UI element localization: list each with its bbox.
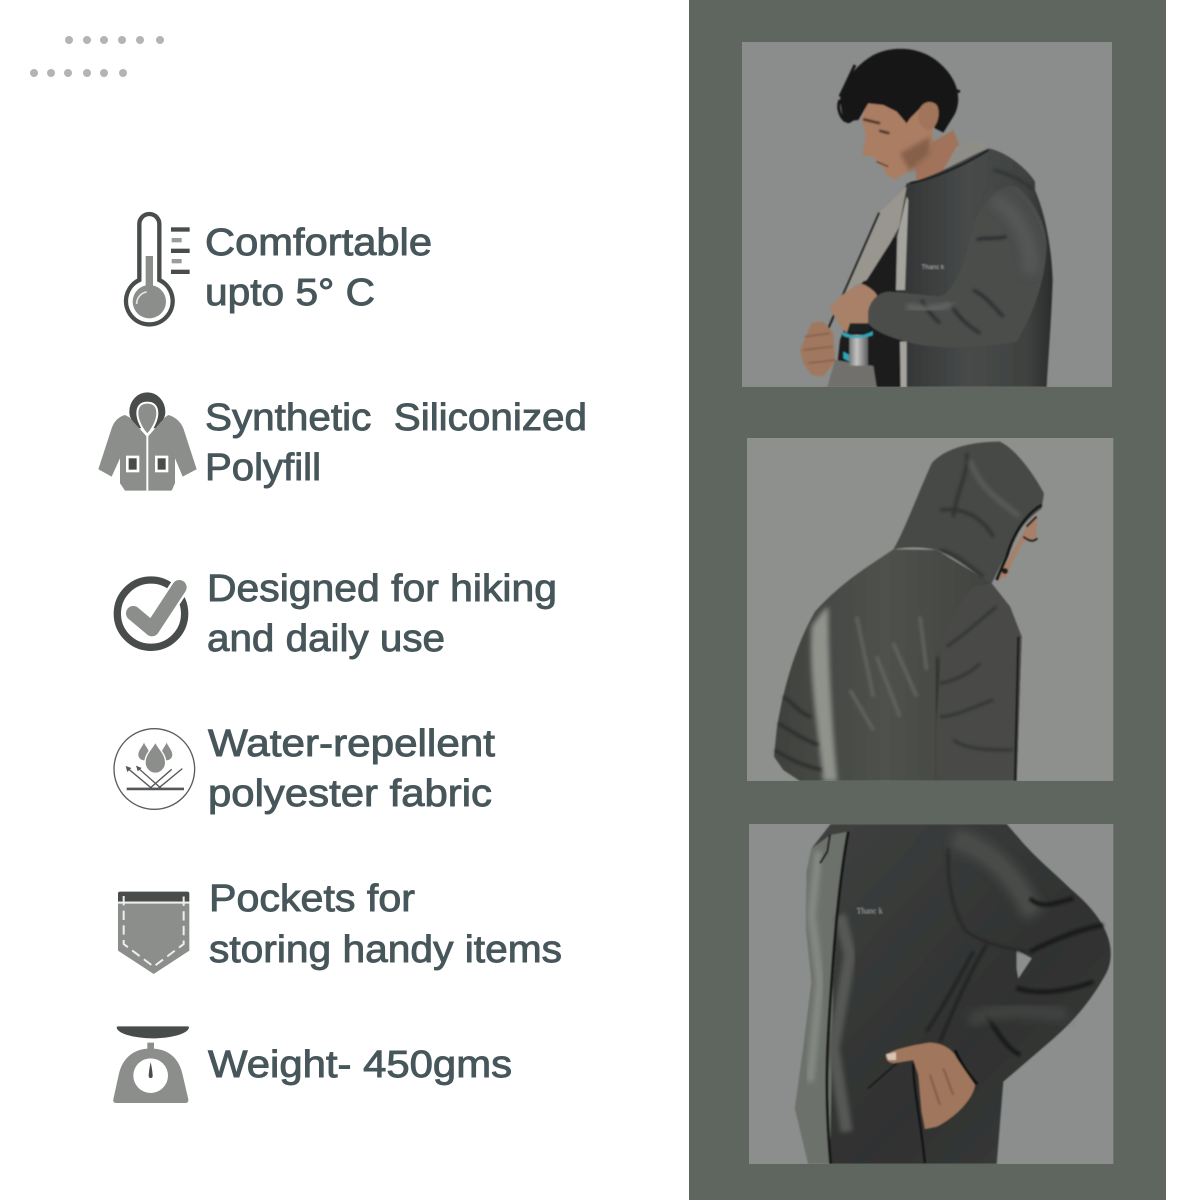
- back highlight: [811, 607, 837, 781]
- face: [862, 103, 933, 179]
- text: synthetic siliconized polyfill: Polyfill: [205, 447, 321, 489]
- text: designed for hiking: [207, 568, 557, 660]
- hood fold: [910, 150, 988, 183]
- icon: thermometer: [126, 214, 190, 324]
- upper hand: [830, 284, 877, 333]
- lining panel: [844, 186, 908, 292]
- hood: [893, 442, 1044, 583]
- icon: jacket: [98, 392, 197, 491]
- feature: pockets: [118, 878, 562, 974]
- text: designed for hiking: Designed for hiking: [207, 568, 557, 610]
- neck: [913, 130, 962, 182]
- jacket body and arm: [795, 824, 1111, 1164]
- text: pockets for storing handy items: Pockets for: [209, 878, 415, 920]
- photo: man from behind with hood: [747, 438, 1113, 781]
- icon: check mark: [117, 580, 185, 647]
- text: pockets for storing handy items: storing handy items: [209, 929, 562, 971]
- text: designed for hiking: and daily use: [207, 618, 445, 660]
- pocket zipper: [913, 1063, 925, 1163]
- icon: pocket: [118, 892, 189, 974]
- cuff: [955, 1050, 977, 1084]
- text: weight 450gms: Weight- 450gms: [208, 1044, 512, 1086]
- panel: photo column: [689, 0, 1166, 1200]
- lower pocket: [827, 360, 877, 387]
- text: synthetic siliconized polyfill: Synthetic Siliconized: [205, 397, 587, 439]
- text: pockets for storing handy items: [209, 878, 562, 971]
- hood lining: [943, 145, 988, 170]
- sleeve: [936, 583, 1022, 781]
- bottle: [849, 335, 868, 366]
- logo: Thanc k: [857, 906, 883, 915]
- gap between arm and torso: [1017, 950, 1032, 978]
- text: comfortable upto 5 C: upto 5° C: [205, 272, 375, 314]
- feature: comfort: [126, 214, 432, 324]
- text: synthetic siliconized polyfill: [205, 397, 587, 489]
- text: comfortable upto 5 C: Comfortable: [205, 222, 432, 264]
- sleeve shading: [948, 848, 1027, 952]
- text: water-repellent polyester fabric: Water-repellent: [208, 723, 495, 765]
- text: water-repellent polyester fabric: [208, 723, 495, 815]
- zipper: [827, 832, 848, 1164]
- hand: [886, 1043, 975, 1129]
- feature: water repellent: [114, 723, 495, 815]
- text: water-repellent polyester fabric: polyester fabric: [208, 773, 492, 815]
- lower hand: [800, 322, 835, 377]
- sleeve: [868, 186, 1047, 347]
- feature: polyfill: [98, 392, 587, 491]
- logo: Thanc k: [922, 264, 945, 271]
- feature: weight: [113, 1026, 512, 1103]
- feature: hiking: [117, 568, 557, 660]
- icon: water drops: [114, 729, 195, 809]
- face edge: [997, 516, 1037, 580]
- left lining panel: [795, 832, 848, 1164]
- inner shirt: [837, 236, 901, 387]
- photo: man opening jacket pocket: [742, 42, 1112, 387]
- photo: man with hand in pocket: [749, 824, 1113, 1164]
- feature list: [98, 214, 587, 1103]
- icon: kitchen scale: [113, 1026, 189, 1103]
- back body: [774, 549, 1022, 781]
- jacket body: [887, 148, 1053, 387]
- hair: [840, 49, 958, 133]
- ear: [918, 102, 939, 130]
- text: comfortable upto 5 C: [205, 222, 432, 314]
- decorative dots: [30, 36, 164, 77]
